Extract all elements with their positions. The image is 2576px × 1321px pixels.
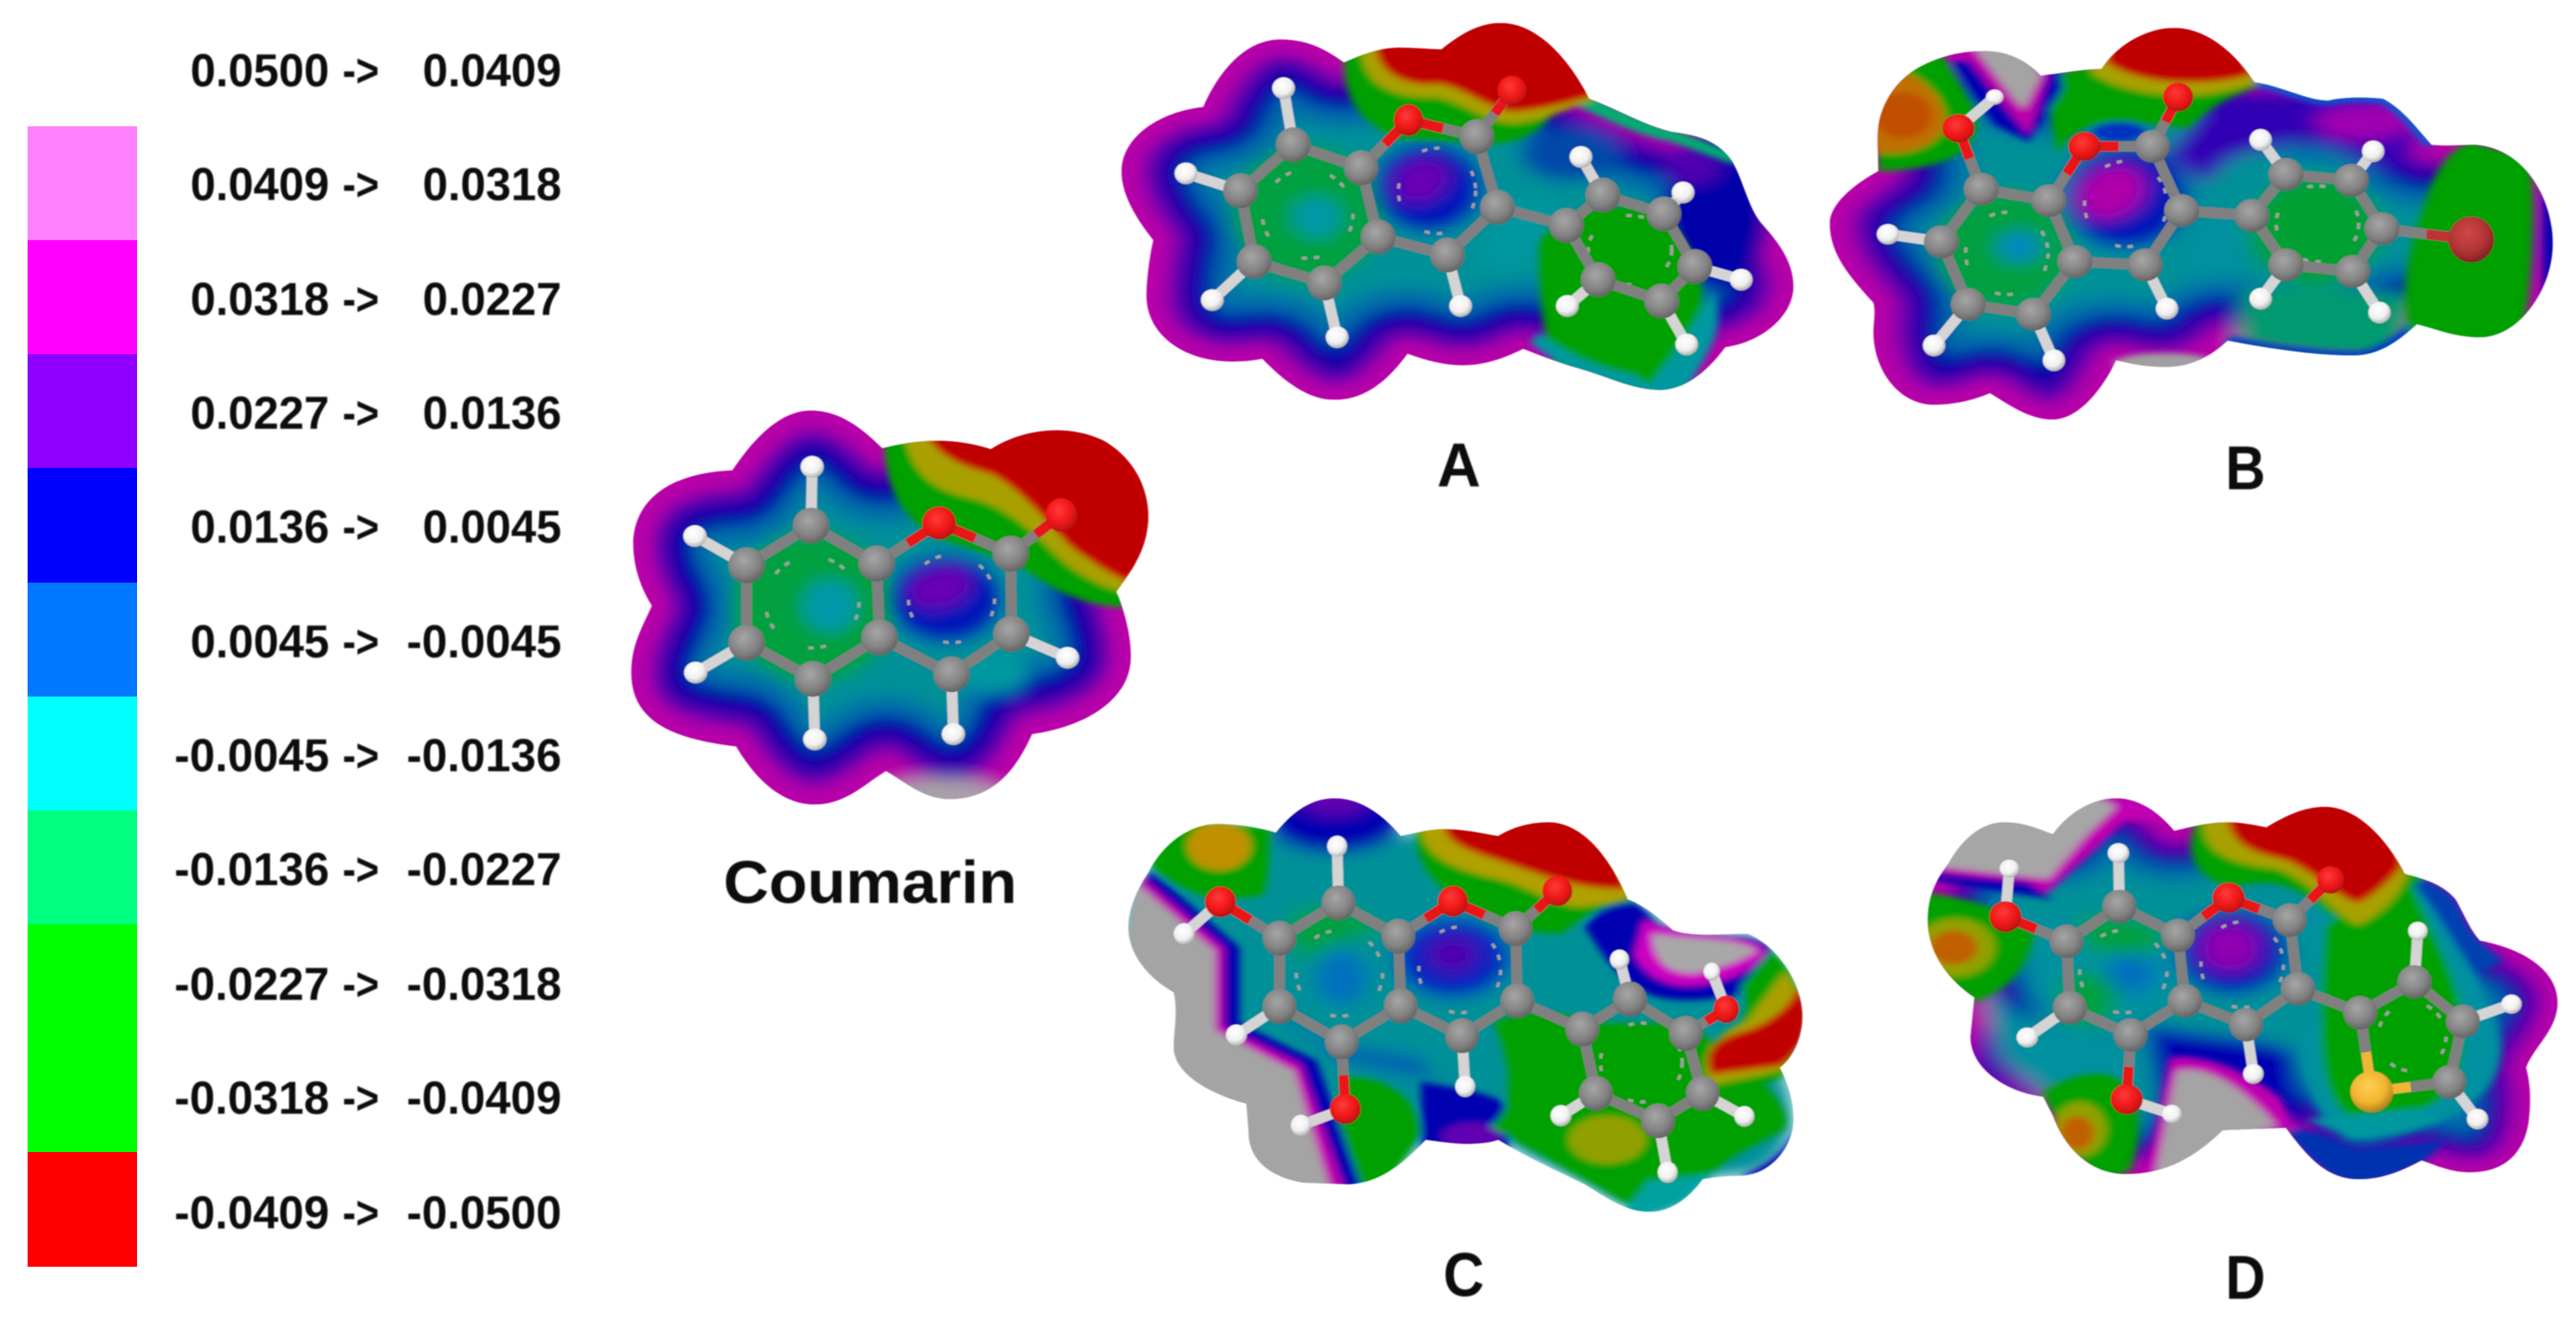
legend value ranges: -0.0318 <box>174 1073 329 1124</box>
legend value ranges: -0.0136 <box>407 730 561 782</box>
molecule C ball-and-stick model <box>1174 835 1755 1183</box>
legend colour bar <box>28 126 137 1267</box>
legend value ranges: 0.0318 <box>423 159 561 211</box>
legend value ranges <box>174 45 561 1239</box>
legend value ranges: 0.0318 <box>190 274 329 326</box>
legend value ranges: -0.0227 <box>407 844 561 896</box>
label: D: D <box>2225 1243 2265 1312</box>
legend value ranges: -> <box>343 502 379 553</box>
legend value ranges: 0.0136 <box>190 502 329 553</box>
molecule A potential surface <box>1121 0 1794 401</box>
legend value ranges: 0.0500 <box>190 45 329 97</box>
molecule B ball-and-stick model <box>1877 83 2494 371</box>
legend value ranges: -> <box>343 274 379 326</box>
molecule D ball-and-stick model <box>1990 843 2522 1130</box>
legend value ranges: -0.0500 <box>407 1188 561 1239</box>
legend value ranges: -0.0227 <box>174 959 329 1011</box>
label: B: B <box>2225 433 2265 503</box>
legend value ranges: -> <box>343 844 379 896</box>
legend value ranges: -0.0318 <box>407 959 561 1011</box>
legend value ranges: 0.0227 <box>190 388 329 439</box>
legend value ranges: 0.0409 <box>423 45 561 97</box>
molecule C potential surface <box>1112 785 1812 1222</box>
molecule A <box>1121 0 1794 401</box>
legend value ranges: -> <box>343 616 379 668</box>
label: A: A <box>1437 431 1481 500</box>
legend value ranges: -> <box>343 1188 379 1239</box>
legend value ranges: -0.0045 <box>407 616 561 668</box>
legend value ranges: -> <box>343 159 379 211</box>
legend value ranges: -> <box>343 45 379 97</box>
legend value ranges: 0.0227 <box>423 274 561 326</box>
legend value ranges: -0.0409 <box>174 1188 329 1239</box>
label: Coumarin: Coumarin <box>723 849 1017 916</box>
coumarin potential surface <box>630 409 1150 806</box>
legend value ranges: 0.0045 <box>423 502 561 553</box>
legend value ranges: -0.0409 <box>407 1073 561 1124</box>
label: C: C <box>1443 1240 1484 1309</box>
legend value ranges: 0.0409 <box>190 159 329 211</box>
legend value ranges: -0.0045 <box>174 730 329 782</box>
molecule B potential surface <box>1829 16 2572 420</box>
molecule D <box>1918 790 2557 1184</box>
coumarin ball-and-stick model <box>683 456 1079 750</box>
colour scale legend <box>28 45 561 1267</box>
molecule B <box>1829 16 2572 420</box>
molecule A ball-and-stick model <box>1175 76 1753 355</box>
legend value ranges: -> <box>343 959 379 1011</box>
legend value ranges: 0.0136 <box>423 388 561 439</box>
molecule D potential surface <box>1918 790 2557 1184</box>
legend value ranges: -> <box>343 730 379 782</box>
molecule: coumarin <box>630 409 1150 806</box>
legend value ranges: 0.0045 <box>190 616 329 668</box>
legend value ranges: -0.0136 <box>174 844 329 896</box>
legend value ranges: -> <box>343 1073 379 1124</box>
molecule C <box>1112 785 1812 1222</box>
legend value ranges: -> <box>343 388 379 439</box>
